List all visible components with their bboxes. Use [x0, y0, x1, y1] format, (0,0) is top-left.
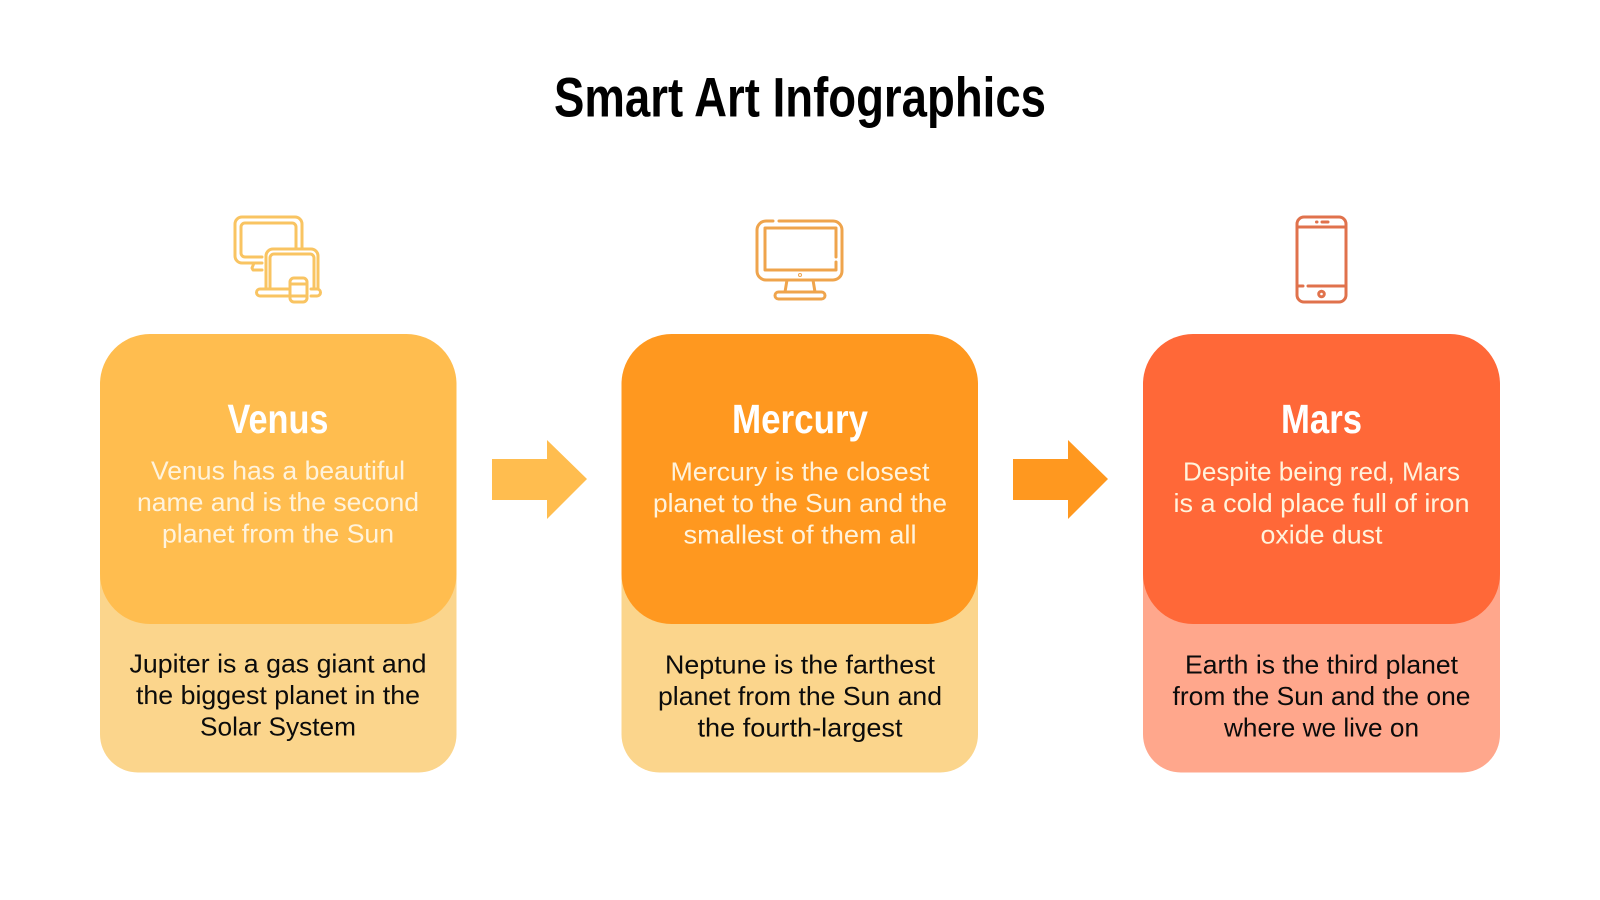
- lower card: Venus: [100, 500, 456, 772]
- text: Mercury description: smallest of them all: [684, 520, 916, 550]
- text: Mercury description: [653, 456, 947, 550]
- lower card: Mercury: [622, 500, 978, 772]
- heading: Mars: Mars: [1281, 396, 1362, 442]
- text: Mars description: is a cold place full of iron: [1174, 488, 1470, 518]
- text: Venus description: name and is the second: [137, 487, 419, 517]
- panel: Mercury: [622, 334, 978, 772]
- text: Mars description: Despite being red, Mars: [1183, 456, 1460, 486]
- upper card: Mercury: [622, 334, 978, 624]
- upper card: Mars: [1143, 334, 1500, 624]
- icon: multiple devices: [235, 217, 321, 302]
- text: Venus description: Venus has a beautiful: [151, 456, 405, 486]
- text: Mars description: oxide dust: [1260, 520, 1383, 550]
- text: Neptune description: the fourth-largest: [698, 712, 903, 742]
- arrow: Mercury to Mars: [1013, 440, 1108, 519]
- text: Earth description: Earth is the third planet: [1185, 650, 1459, 680]
- text: Mercury description: Mercury is the closest: [670, 456, 930, 486]
- text: Mercury description: planet to the Sun and the: [653, 488, 947, 518]
- icon: smartphone: [1297, 217, 1346, 302]
- text: Venus description: [137, 456, 419, 548]
- text: Jupiter description: Solar System: [200, 712, 356, 742]
- title: Smart Art Infographics: [554, 66, 1046, 128]
- text: Earth description: where we live on: [1223, 712, 1419, 742]
- text: Neptune description: Neptune is the farthest: [665, 650, 936, 680]
- text: Jupiter description: [130, 648, 426, 742]
- text: Earth description: [1172, 650, 1470, 742]
- heading: Venus: Venus: [228, 396, 328, 442]
- icon: desktop monitor: [757, 221, 842, 299]
- upper card: Venus: [100, 334, 456, 624]
- text: Neptune description: [658, 650, 942, 742]
- panel: Mars: [1143, 334, 1500, 772]
- text: Jupiter description: Jupiter is a gas giant and: [130, 648, 426, 678]
- lower card: Mars: [1143, 500, 1500, 772]
- text: Mars description: [1174, 456, 1470, 550]
- text: Jupiter description: the biggest planet in the: [136, 680, 420, 710]
- text: Venus description: planet from the Sun: [162, 518, 394, 548]
- text: Earth description: from the Sun and the one: [1172, 681, 1470, 711]
- arrow: Venus to Mercury: [492, 440, 587, 519]
- heading: Mercury: Mercury: [732, 396, 868, 442]
- panel: Venus: [100, 334, 456, 772]
- text: Neptune description: planet from the Sun and: [658, 681, 942, 711]
